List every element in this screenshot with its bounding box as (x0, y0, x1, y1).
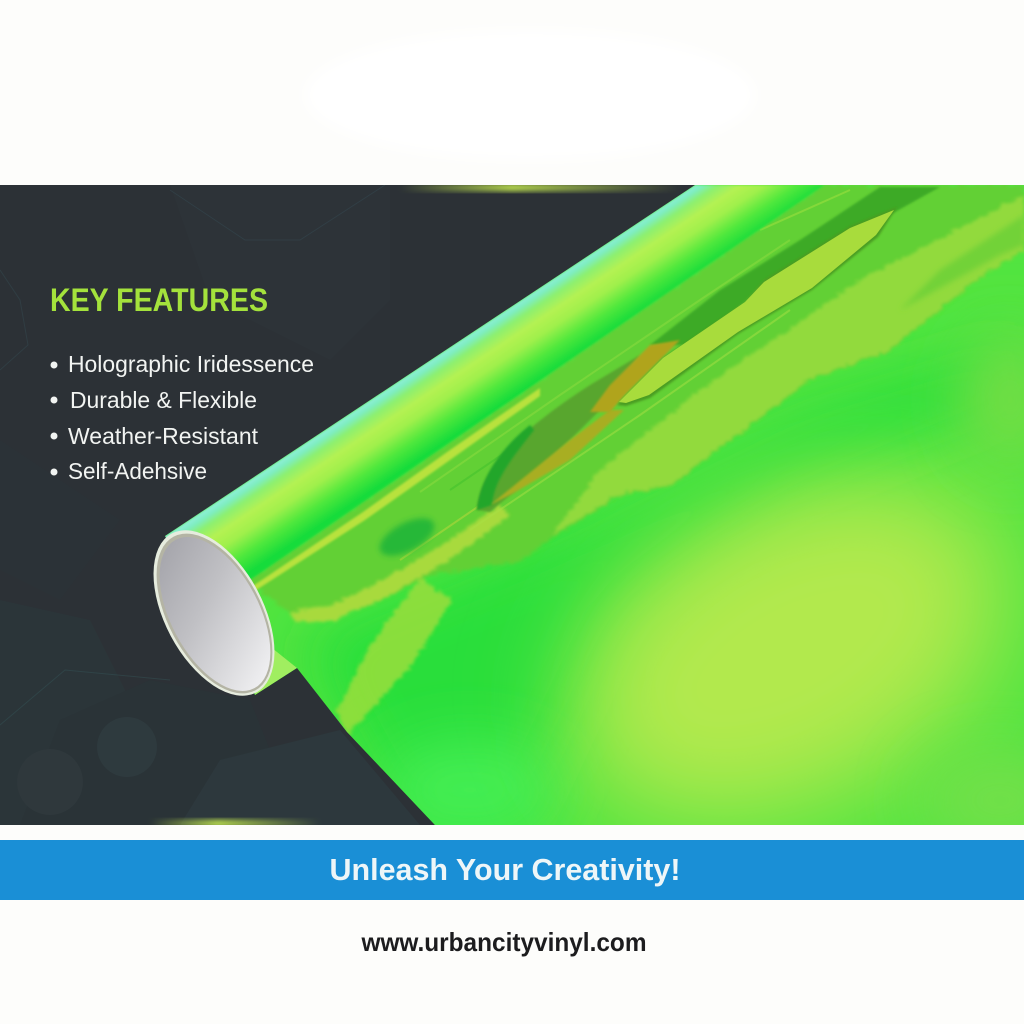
bottom right tone (922, 739, 1024, 825)
vinyl sheet and roll (165, 185, 1024, 825)
light lens outline (617, 207, 897, 406)
small green swirl (378, 514, 436, 560)
blue slogan banner (0, 840, 1024, 900)
stripe lime side (552, 195, 1024, 535)
feature: holographic iridescence: Holographic Iridessence (68, 351, 314, 377)
light central lens (619, 210, 894, 403)
parallel fine streaks (400, 190, 850, 560)
right side lime (960, 330, 1024, 470)
lower left brighter green (380, 740, 560, 840)
website url: www.urbancityvinyl.com (361, 927, 646, 957)
geometric background pattern (0, 185, 385, 777)
yellow patch lower left (337, 578, 452, 735)
feature list (50, 351, 314, 484)
lower yellow streak (288, 505, 510, 622)
roll body band (165, 185, 824, 580)
lower dark olive lens (477, 355, 640, 512)
upper dark band (650, 187, 940, 345)
sheet base colour (150, 185, 1024, 825)
lens left outline (477, 425, 534, 510)
feature: self-adhesive: Self-Adehsive (68, 458, 207, 484)
lime bloom (508, 412, 1024, 825)
heading: key features: KEY FEATURES (50, 282, 268, 318)
thin yellow line (247, 388, 540, 594)
slogan text: Unleash Your Creativity! (330, 852, 680, 887)
panel: dark product banner (0, 185, 695, 825)
feature: weather-resistant: Weather-Resistant (68, 423, 259, 449)
olive yellow strip (490, 410, 624, 505)
bottom glow (150, 820, 320, 827)
roll tube end (128, 511, 300, 715)
amber swirl (590, 340, 680, 412)
feature: durable and flexible: Durable & Flexible (70, 387, 257, 413)
stripe region (247, 185, 1024, 613)
top glow (400, 184, 680, 191)
roll underside sliver (255, 650, 297, 695)
saturated green band (300, 340, 1024, 825)
upper right fold (900, 215, 1024, 310)
